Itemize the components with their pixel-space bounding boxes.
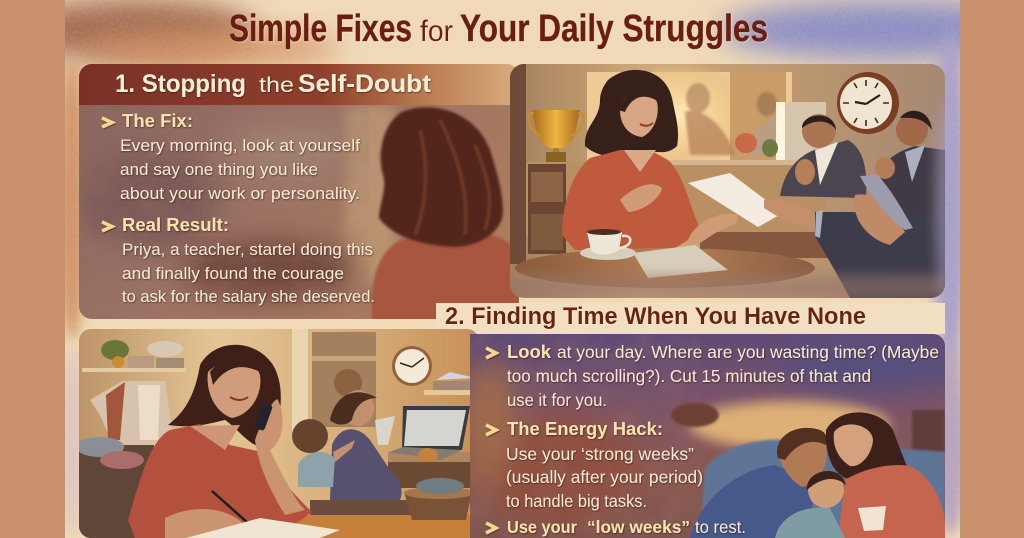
text block: the energy hack: to handle big tasks. (506, 491, 647, 511)
cream backing for heading 2 (436, 303, 945, 334)
text block: the energy hack: (usually after your period) (506, 467, 703, 487)
heading: stopping the self-doubt: 1. Stopping (115, 70, 246, 98)
flowers (735, 133, 778, 157)
mottled colours (465, 334, 960, 538)
hanging clothes (90, 381, 172, 450)
text block: real result (102, 214, 375, 306)
picture: multitasking mother (76, 329, 479, 538)
face (208, 361, 260, 418)
text block: the fix: The Fix: (122, 110, 193, 131)
text block: the fix: and say one thing you like (120, 160, 318, 179)
mug (858, 506, 886, 531)
window glow behind the woman (345, 105, 395, 285)
side shelf with papers (424, 372, 479, 395)
heading: stopping the self-doubt: the (259, 74, 294, 97)
title: Your Daily Struggles (460, 8, 768, 50)
room wall (79, 329, 479, 538)
woman hair (826, 412, 908, 479)
dark door frame (510, 64, 526, 264)
heading: finding time: 2. Finding Time When You Have None (445, 303, 866, 330)
icon: chevron (486, 348, 496, 358)
man (690, 465, 815, 538)
bookshelf (528, 164, 566, 254)
icon: wall clock (837, 72, 899, 134)
wall clock (392, 346, 432, 386)
heading band (79, 64, 519, 105)
upper left shelf (82, 340, 186, 372)
red shirt woman (562, 70, 738, 250)
dark hair (379, 107, 503, 247)
colleague clapping right (872, 110, 945, 212)
blouse (562, 150, 702, 250)
title: for (420, 15, 453, 48)
laptop (389, 406, 470, 462)
hand on chest (620, 184, 662, 212)
panel: stopping the self-doubt (79, 64, 530, 325)
writing hand with pen (165, 509, 245, 538)
hair back (585, 70, 678, 157)
panel: finding time list (465, 334, 960, 538)
mottled panel texture (80, 126, 371, 314)
family (690, 412, 947, 538)
text block: look at your day: Look (507, 341, 552, 362)
laundry pile and trunk (76, 437, 154, 538)
text block: the fix (102, 110, 360, 203)
icon: chevron (486, 425, 496, 435)
white partition (785, 102, 826, 160)
face (620, 94, 658, 137)
text block: the energy hack (486, 418, 703, 511)
heading: stopping the self-doubt: Self-Doubt (298, 70, 432, 98)
text block: low weeks (486, 517, 746, 537)
panel background (79, 64, 519, 319)
text block: the fix: about your work or personality. (120, 184, 360, 203)
panel background (470, 334, 945, 538)
desk (388, 458, 479, 488)
hair (168, 345, 281, 447)
laundry basket (404, 478, 474, 520)
wall column (292, 329, 308, 439)
orange table (290, 515, 479, 538)
office window (587, 72, 792, 162)
text block: the energy hack: The Energy Hack: (507, 418, 663, 439)
title: Simple Fixes (229, 8, 412, 50)
warm window glow (690, 401, 890, 449)
text block: look at your day: use it for you. (507, 390, 607, 410)
text block: real result: to ask for the salary she deserved. (122, 287, 375, 306)
phone arm (255, 399, 305, 515)
back shelves (312, 332, 376, 427)
text block: the fix: Every morning, look at yourself (120, 136, 360, 155)
counter (526, 162, 826, 237)
icon: gold trophy (528, 110, 584, 162)
text block: low weeks: Use your (507, 517, 577, 537)
text block: look at your day: at your day. Where are you wasting time? (Maybe (557, 342, 939, 362)
couch base (310, 500, 420, 518)
document on table (633, 245, 728, 278)
window colleagues (685, 83, 782, 155)
heading: stopping the self-doubt (115, 70, 432, 98)
text block: real result: and finally found the courage (122, 264, 344, 283)
woman blouse (838, 465, 947, 538)
woman face (834, 424, 873, 466)
text block: real result: Real Result: (122, 214, 229, 235)
text block: look at your day: too much scrolling?). Cut 15 minutes of that and (507, 366, 871, 386)
lower counter band (700, 232, 828, 258)
woman seen from behind (372, 107, 530, 325)
colleague clapping left (780, 114, 866, 198)
round table (515, 248, 815, 288)
room background (510, 64, 945, 298)
blue sofa (700, 440, 945, 538)
blouse (128, 424, 312, 538)
text block: low weeks: to rest. (695, 517, 746, 537)
text block: look at your day (486, 341, 939, 410)
text block: low weeks: “low weeks” (587, 517, 690, 537)
text block: the energy hack: Use your ‘strong weeks” (506, 444, 694, 464)
icon: chevron (102, 118, 112, 127)
handing arm and suit (764, 175, 945, 298)
title (229, 8, 768, 50)
icon: chevron (102, 222, 112, 231)
books on the right (912, 410, 945, 452)
plant silhouette (671, 403, 719, 427)
picture: confident woman at work (505, 60, 955, 301)
paper being handed over (688, 173, 783, 227)
open notebook (186, 518, 340, 538)
mother and toddler on couch (292, 390, 402, 500)
woman on the phone (128, 345, 340, 538)
image fade (505, 275, 950, 301)
red blouse (371, 234, 519, 319)
hair highlights (415, 120, 490, 235)
icon: chevron (486, 523, 496, 533)
coffee cup (580, 229, 636, 260)
forearm with paper (688, 214, 738, 246)
child (775, 507, 845, 538)
text block: real result: Priya, a teacher, startel doing this (122, 240, 373, 259)
